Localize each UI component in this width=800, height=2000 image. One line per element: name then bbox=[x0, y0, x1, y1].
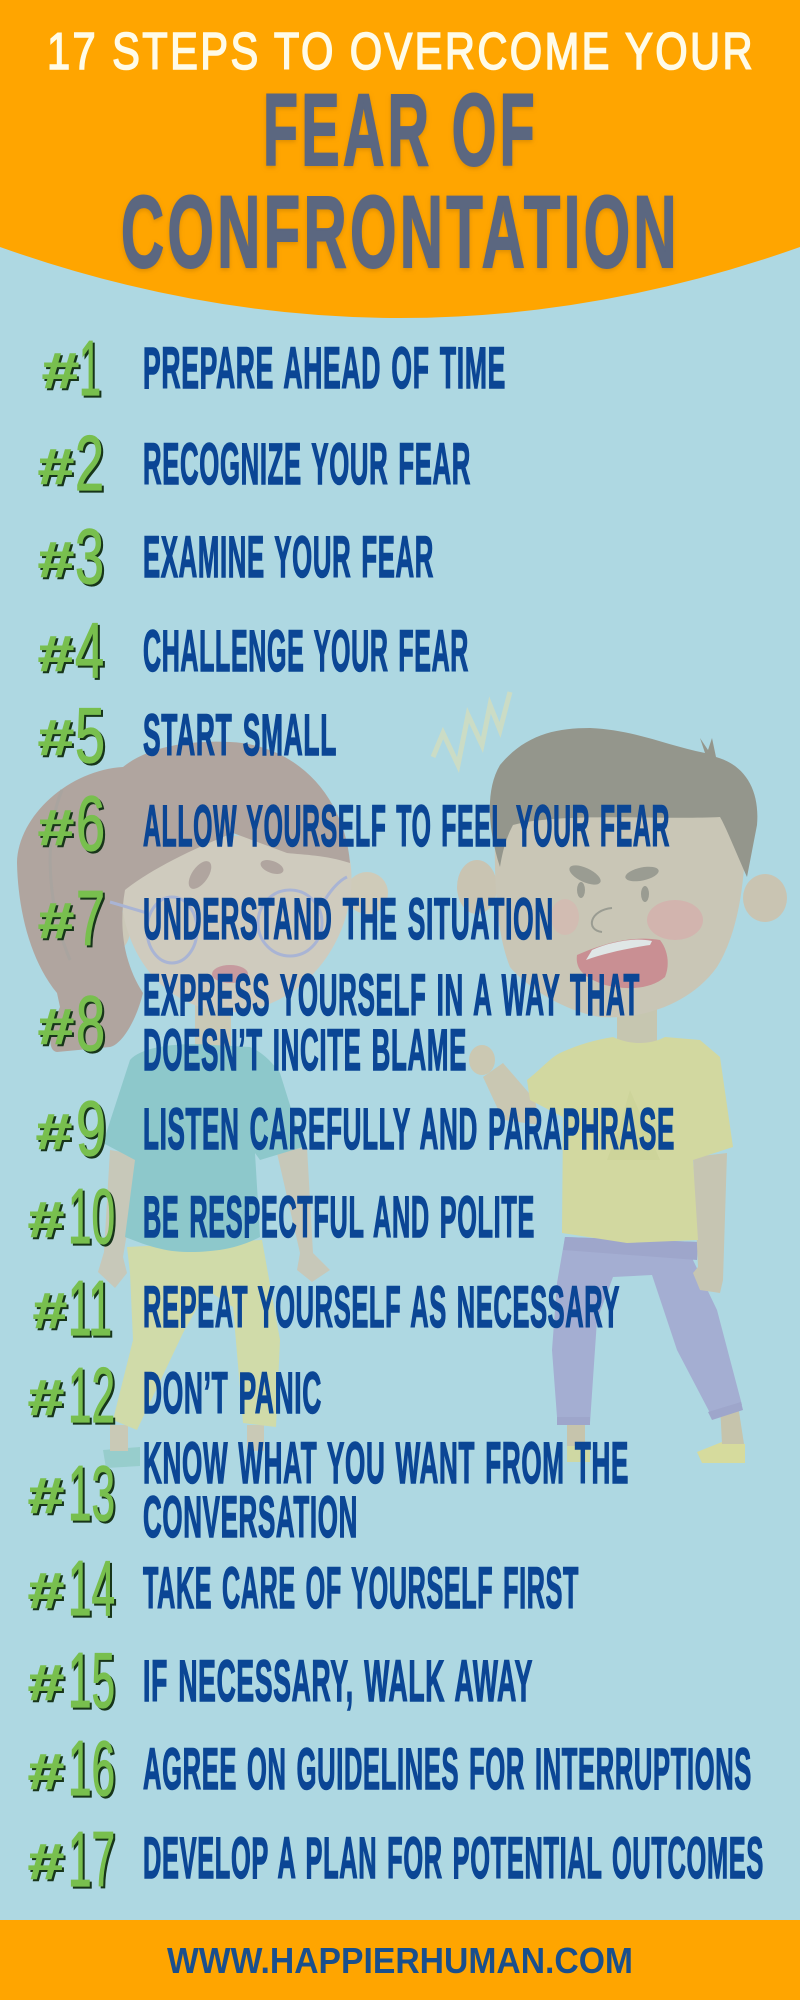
text 8 bbox=[143, 963, 640, 1083]
number 6: 6 bbox=[76, 779, 105, 867]
number 13 bbox=[27, 1449, 115, 1537]
step 14 bbox=[27, 1544, 579, 1632]
number 12: # bbox=[27, 1370, 63, 1426]
mouth bbox=[577, 939, 668, 988]
number 16 bbox=[27, 1724, 115, 1812]
number 16: 16 bbox=[68, 1724, 115, 1812]
step 8 bbox=[37, 963, 640, 1083]
zigzag lines bbox=[433, 692, 510, 765]
trousers bbox=[113, 1240, 280, 1430]
number 10 bbox=[27, 1172, 115, 1260]
text: DON’T PANIC bbox=[143, 1361, 322, 1426]
number 7 bbox=[37, 874, 105, 962]
glasses bbox=[110, 877, 347, 963]
number 17: # bbox=[27, 1834, 63, 1890]
footer url: WWW.HAPPIERHUMAN.COM bbox=[167, 1940, 633, 1981]
number 1: # bbox=[41, 343, 78, 399]
step 3 bbox=[37, 512, 434, 600]
number 7: # bbox=[37, 893, 73, 949]
number 17 bbox=[27, 1815, 115, 1903]
number 1 bbox=[41, 324, 101, 412]
text 13 bbox=[143, 1431, 629, 1550]
right arm bbox=[693, 1153, 727, 1293]
number 15: 15 bbox=[68, 1636, 115, 1724]
number 3: 3 bbox=[75, 512, 104, 600]
number 1: 1 bbox=[79, 324, 101, 412]
step 13 bbox=[27, 1431, 629, 1550]
number 8: 8 bbox=[76, 979, 105, 1067]
illustration: girl bbox=[17, 742, 388, 1468]
number 5 bbox=[37, 691, 105, 779]
step 4 bbox=[37, 606, 469, 694]
text: EXAMINE YOUR FEAR bbox=[143, 525, 434, 590]
raised arm bbox=[483, 1063, 540, 1125]
number 2: # bbox=[37, 439, 73, 495]
text: START SMALL bbox=[143, 703, 337, 768]
number 6: # bbox=[37, 800, 73, 856]
shirt bbox=[527, 1037, 733, 1243]
number 3: # bbox=[37, 532, 73, 588]
number 12: 12 bbox=[68, 1351, 115, 1439]
hair bbox=[490, 728, 757, 877]
shirt bbox=[103, 1044, 303, 1252]
number 2 bbox=[37, 419, 104, 507]
number 9: 9 bbox=[76, 1084, 106, 1172]
number 8: # bbox=[37, 999, 73, 1055]
trousers bbox=[552, 1237, 742, 1423]
number 2: 2 bbox=[75, 419, 104, 507]
footer band bbox=[0, 1920, 800, 2000]
number 16: # bbox=[27, 1744, 63, 1800]
number 9 bbox=[35, 1084, 106, 1172]
number 8 bbox=[37, 979, 105, 1067]
number 3 bbox=[37, 512, 104, 600]
number 9: # bbox=[35, 1104, 71, 1160]
number 7: 7 bbox=[76, 874, 105, 962]
step 17 bbox=[27, 1815, 764, 1903]
step 11 bbox=[32, 1264, 620, 1352]
number 15 bbox=[27, 1636, 115, 1724]
number 4: 4 bbox=[75, 606, 104, 694]
illustration: arguing girl and boy bbox=[17, 692, 787, 1468]
number 12 bbox=[27, 1351, 115, 1439]
title: fear of confrontation bbox=[121, 73, 680, 289]
text 13: CONVERSATION bbox=[143, 1485, 358, 1550]
step 7 bbox=[37, 874, 554, 962]
number 11 bbox=[32, 1264, 112, 1352]
arms bbox=[98, 1147, 330, 1288]
number 14 bbox=[27, 1544, 115, 1632]
step 15 bbox=[27, 1636, 533, 1724]
step 2 bbox=[37, 419, 471, 507]
number 4 bbox=[37, 606, 104, 694]
number 14: # bbox=[27, 1563, 63, 1619]
number 11: 11 bbox=[68, 1264, 112, 1352]
step 5 bbox=[37, 691, 337, 779]
number 13: # bbox=[27, 1468, 63, 1524]
illustration: boy bbox=[457, 728, 787, 1463]
step 9 bbox=[35, 1084, 675, 1172]
step 12 bbox=[27, 1351, 322, 1439]
number 10: 10 bbox=[68, 1172, 115, 1260]
hair bbox=[17, 742, 350, 1052]
number 5: # bbox=[37, 710, 73, 766]
step 1 bbox=[41, 324, 506, 412]
number 11: # bbox=[32, 1283, 66, 1339]
number 14: 14 bbox=[68, 1544, 115, 1632]
step 6 bbox=[37, 779, 670, 867]
number 5: 5 bbox=[75, 691, 105, 779]
step 16 bbox=[27, 1724, 752, 1812]
step 10 bbox=[27, 1172, 535, 1260]
number 15: # bbox=[27, 1655, 63, 1711]
number 6 bbox=[37, 779, 105, 867]
header: orange curved banner bbox=[0, 0, 800, 318]
title: fear of confrontation: FEAR OF bbox=[263, 73, 538, 187]
number 4: # bbox=[37, 626, 73, 682]
number 17: 17 bbox=[68, 1815, 115, 1903]
number 10: # bbox=[27, 1192, 63, 1248]
number 13: 13 bbox=[68, 1449, 115, 1537]
